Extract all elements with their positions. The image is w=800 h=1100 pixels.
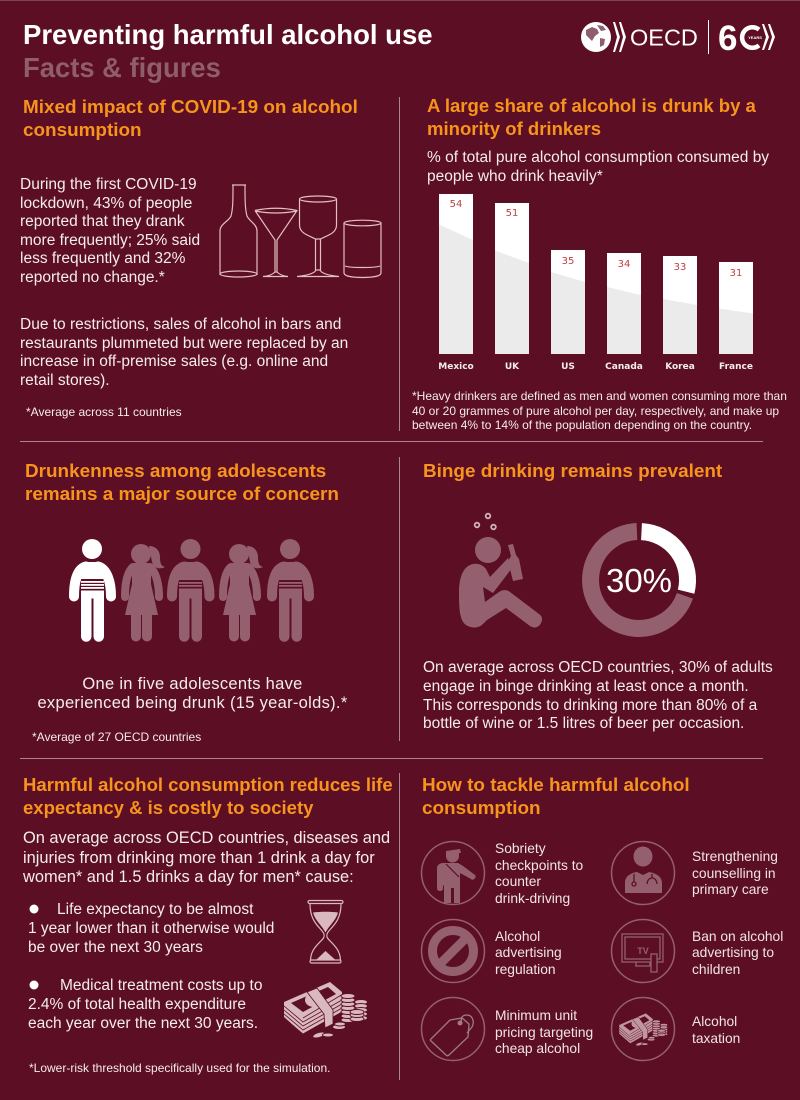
logo: OECD 60 years	[581, 19, 775, 58]
text: on-premise sales: increase in off-premise sales (e.g. online and	[20, 353, 328, 370]
policy: sobriety checkpoints	[422, 841, 584, 906]
chart: 30% donut	[591, 532, 688, 628]
policy: ban on advertising to children: children	[692, 962, 740, 977]
heading: minority of drinkers: A large share of alcohol is drunk by a	[427, 95, 757, 116]
bar chart: 33	[674, 262, 686, 273]
heading: tackle: How to tackle harmful alcohol	[422, 775, 690, 796]
heading: minority of drinkers: minority of drinkers	[427, 118, 601, 139]
policy: minimum unit pricing: Minimum unit	[495, 1008, 577, 1023]
icon: hourglass	[308, 900, 343, 963]
bar chart: US	[561, 362, 575, 372]
text: lockdown drinking frequency: reported no change.*	[20, 269, 165, 286]
footnote: heavy drinkers definition: 40 or 20 grammes of pure alcohol per day, respectively, and make up	[412, 404, 779, 418]
text: binge drinking explanation: This corresponds to drinking more than 80% of a	[423, 697, 758, 714]
bullet: life expectancy	[28, 901, 274, 956]
bar chart: 51	[506, 208, 518, 219]
policy: sobriety checkpoints: drink-driving	[495, 891, 570, 906]
icon: person drinking from a bottle	[459, 514, 542, 628]
logo: OECD 60 years: YEARS	[748, 35, 762, 40]
policy: minimum unit pricing	[422, 998, 593, 1060]
policy: minimum unit pricing: cheap alcohol	[495, 1041, 580, 1056]
policy: ban on advertising to children: advertising to	[692, 945, 774, 960]
footnote: 27 OECD countries: *Average of 27 OECD countries	[32, 730, 201, 744]
footnote: lower-risk threshold: *Lower-risk threshold specifically used for the simulation.	[29, 1061, 330, 1075]
policy: sobriety checkpoints: Sobriety	[495, 841, 546, 856]
heading: drunkenness: Drunkenness among adolescents	[25, 461, 326, 482]
heading: COVID-19: Mixed impact of COVID-19 on alcohol	[23, 97, 358, 118]
icon: girl	[125, 544, 165, 642]
bullet: life expectancy: be over the next 30 years	[28, 939, 203, 956]
text: one in five: experienced being drunk (15 year-olds).*	[37, 694, 348, 712]
text: one in five: One in five adolescents have	[82, 675, 303, 693]
text: lockdown drinking frequency: reported that they drank	[20, 213, 185, 230]
bar chart: 35	[562, 256, 574, 267]
subtitle: Facts & figures	[23, 52, 221, 83]
panel: how to tackle	[422, 775, 783, 1060]
bullet: life expectancy: Life expectancy to be almost	[57, 901, 254, 918]
text: binge drinking explanation: On average across OECD countries, 30% of adults	[423, 659, 773, 676]
policy: advertising regulation: regulation	[495, 962, 556, 977]
text: lockdown drinking frequency: During the first COVID-19	[20, 176, 197, 193]
policy: strengthening counselling	[612, 842, 778, 904]
bullet: medical treatment costs: each year over the next 30 years.	[28, 1015, 258, 1032]
bar chart: Canada	[605, 362, 643, 372]
heading: binge drinking: Binge drinking remains prevalent	[423, 461, 723, 482]
icon: money and coins	[284, 982, 368, 1039]
icon: girl	[223, 544, 263, 642]
icon: boy	[272, 539, 309, 642]
icon: boy highlighted	[74, 539, 111, 642]
chart subtitle: % of total pure alcohol consumption consumed by	[427, 149, 769, 166]
bar chart: UK	[505, 362, 520, 372]
panel: life expectancy and costs	[22, 774, 393, 1075]
policy: alcohol taxation	[612, 998, 740, 1060]
policy: sobriety checkpoints: checkpoints to	[495, 858, 584, 873]
text: thresholds: On average across OECD countries, diseases and	[23, 829, 390, 847]
text: thresholds: women* and 1.5 drinks a day for men* cause:	[22, 868, 354, 886]
policy: advertising regulation: Alcohol	[495, 929, 540, 944]
policy: strengthening counselling: Strengthening	[692, 849, 778, 864]
policy: ban on advertising to children	[612, 920, 783, 982]
bullet: medical treatment costs: Medical treatment costs up to	[60, 977, 262, 994]
bullet: life expectancy: 1 year lower than it otherwise would	[28, 920, 274, 937]
text: lockdown drinking frequency: more frequently; 25% said	[20, 232, 200, 249]
logo: OECD 60 years: OECD	[630, 24, 698, 50]
heading: COVID-19: consumption	[23, 120, 142, 141]
text: on-premise sales: retail stores).	[20, 372, 110, 389]
text: lockdown drinking frequency: less frequently and 32%	[20, 250, 186, 267]
text: on-premise sales: restaurants plummeted but were replaced by an	[20, 335, 348, 352]
bullet: medical treatment costs	[28, 977, 262, 1032]
panel: adolescents	[25, 461, 348, 744]
bar chart: 34	[618, 259, 630, 270]
text: on-premise sales: Due to restrictions, sales of alcohol in bars and	[20, 316, 341, 333]
panel: binge drinking	[423, 461, 773, 732]
heading: life expectancy: Harmful alcohol consumption reduces life	[23, 774, 393, 795]
policy: ban on advertising to children: Ban on alcohol	[692, 929, 783, 944]
pictogram: one in five adolescents	[74, 539, 309, 642]
logo: OECD 60 years: 6	[718, 19, 737, 58]
text: binge drinking explanation: bottle of wine or 1.5 litres of beer per occasion.	[423, 715, 744, 732]
footnote: heavy drinkers definition: between 4% to 14% of the population depending on the country.	[412, 418, 752, 432]
donut value: 30%	[606, 562, 672, 599]
heading: life expectancy: expectancy & is costly to society	[23, 797, 314, 818]
policy: minimum unit pricing: pricing targeting	[495, 1025, 593, 1040]
policy: advertising regulation: advertising	[495, 945, 562, 960]
icon: boy	[172, 539, 210, 642]
policy: ban on advertising to children: TV	[637, 946, 649, 956]
title: Preventing harmful alcohol use	[23, 19, 433, 50]
heading: tackle: consumption	[422, 798, 541, 819]
policy: sobriety checkpoints: counter	[495, 874, 541, 889]
footnote: 11 countries: *Average across 11 countries	[26, 405, 182, 419]
bar chart: France	[719, 362, 753, 372]
text: thresholds: injuries from drinking more than 1 drink a day for	[23, 849, 375, 867]
bullet: medical treatment costs: 2.4% of total health expenditure	[28, 996, 246, 1013]
policy: alcohol taxation: Alcohol	[692, 1014, 737, 1029]
policy: alcohol taxation: taxation	[692, 1031, 740, 1046]
policy: strengthening counselling: primary care	[692, 882, 769, 897]
bar chart: 54	[450, 199, 462, 210]
bar chart: 31	[730, 268, 742, 279]
heading: drunkenness: remains a major source of concern	[25, 484, 339, 505]
chart subtitle: people who drink heavily*	[427, 168, 603, 185]
panel: heavy drinkers	[412, 95, 787, 432]
text: binge drinking explanation: engage in binge drinking at least once a month.	[423, 678, 749, 695]
text: lockdown drinking frequency: lockdown, 43% of people	[20, 195, 192, 212]
footnote: heavy drinkers definition: *Heavy drinkers are defined as men and women consuming more than	[412, 389, 787, 403]
icon: bottle and glasses	[220, 185, 381, 278]
bar chart	[438, 194, 753, 372]
policy: strengthening counselling: counselling in	[692, 866, 776, 881]
policy: advertising regulation	[422, 920, 562, 982]
bar chart: Korea	[665, 362, 695, 372]
bar chart: Mexico	[438, 362, 474, 372]
panel: COVID-19 impact	[20, 97, 381, 419]
